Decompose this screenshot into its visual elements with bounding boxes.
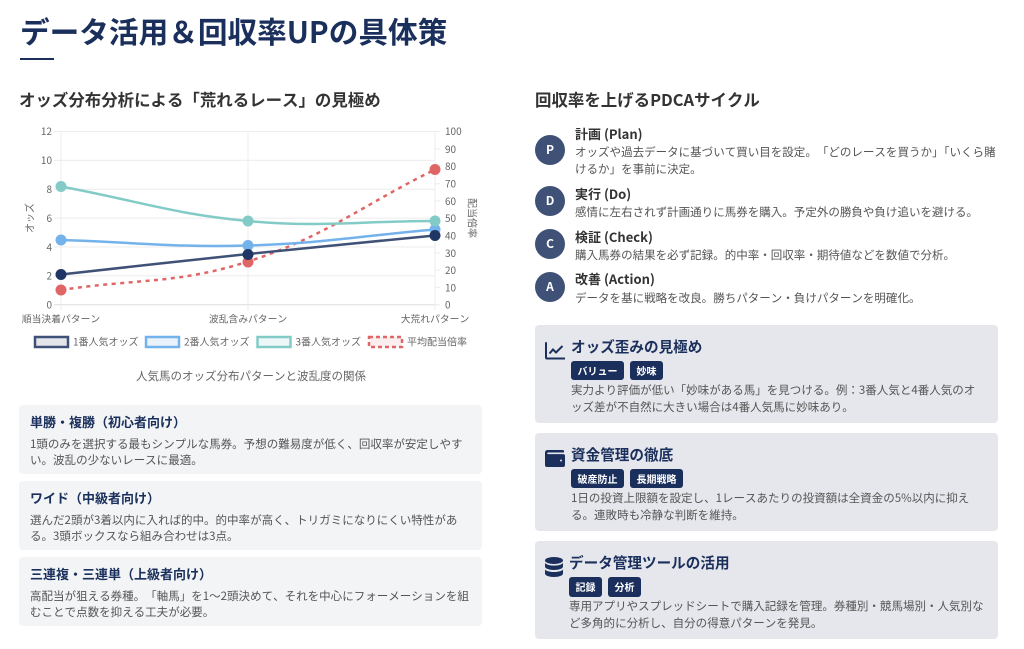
left axis labels <box>41 123 52 312</box>
legend: 3番人気オッズ <box>296 334 361 348</box>
panel: bankroll management <box>535 433 998 531</box>
icon: line chart <box>545 342 565 360</box>
icon: D <box>535 186 565 216</box>
ticket description: る。3頭ボックスなら組み合わせは3点。 <box>30 528 239 544</box>
right axis labels: 30 <box>445 245 457 260</box>
ticket description: い。波乱の少ないレースに最適。 <box>30 452 203 468</box>
PDCA action title: 改善 (Action) <box>575 269 655 288</box>
PDCA plan text <box>575 144 996 177</box>
PDCA do text: 感情に左右されず計画通りに馬券を購入。予定外の勝負や負け追いを避ける。 <box>575 204 978 220</box>
PDCA plan text: けるか」を事前に決定。 <box>575 161 702 177</box>
panel: win and place tickets <box>19 404 482 474</box>
left axis labels: 12 <box>41 123 52 138</box>
tag: 妙味 <box>636 362 656 378</box>
left axis labels: 8 <box>46 181 52 196</box>
legend: 平均配当倍率 <box>407 334 467 348</box>
card heading: 資金管理の徹底 <box>571 444 673 465</box>
ticket description <box>30 436 462 468</box>
card text <box>571 382 975 415</box>
icon: C <box>535 229 565 259</box>
right axis labels: 60 <box>445 193 457 208</box>
icon: A <box>535 272 565 302</box>
card heading: オッズ歪みの見極め <box>571 336 702 357</box>
card text: る。連敗時も冷静な判断を維持。 <box>571 507 744 523</box>
panel: wide tickets <box>19 480 482 550</box>
right axis labels: 100 <box>445 123 462 138</box>
title: データ活用＆回収率UPの具体策 <box>20 9 447 52</box>
card text: ッズ差が不自然に大きい場合は4番人気馬に妙味あり。 <box>571 399 854 415</box>
category labels: 波乱含みパターン <box>209 312 287 326</box>
ticket heading: 単勝・複勝（初心者向け） <box>30 412 186 430</box>
ticket description: むことで点数を抑える工夫が必要。 <box>30 604 214 620</box>
category labels: 大荒れパターン <box>401 312 469 326</box>
tag: 破産防止 <box>578 470 618 486</box>
panel: odds distortion <box>535 325 998 423</box>
legend <box>35 334 467 348</box>
left axis labels: 0 <box>46 296 52 312</box>
tag <box>569 577 602 596</box>
icon: P: P <box>546 141 554 158</box>
icon: D: D <box>546 192 554 209</box>
PDCA do title: 実行 (Do) <box>575 184 631 203</box>
tag <box>608 577 641 596</box>
chart caption: 人気馬のオッズ分布パターンと波乱度の関係 <box>136 368 366 384</box>
tag: 分析 <box>614 579 634 594</box>
right axis labels: 50 <box>445 210 457 225</box>
right axis title: 配当倍率 <box>466 198 480 238</box>
legend: 2番人気オッズ <box>184 334 250 348</box>
right axis labels: 40 <box>445 228 457 242</box>
card text: 1日の投資上限額を設定し、1レースあたりの投資額は全資金の5%以内に抑え <box>571 490 969 506</box>
left axis labels: 10 <box>41 152 52 167</box>
ticket description: 高配当が狙える券種。「軸馬」を1〜2頭決めて、それを中心にフォーメーションを組 <box>30 588 469 604</box>
right axis labels: 90 <box>445 141 457 156</box>
icon: database <box>545 557 563 577</box>
left axis title: オッズ <box>22 203 36 233</box>
left axis labels: 2 <box>46 268 52 282</box>
heading: PDCA: 回収率を上げるPDCAサイクル <box>535 87 760 111</box>
title underline <box>20 58 54 60</box>
ticket heading: ワイド（中級者向け） <box>30 488 160 506</box>
PDCA action text: データを基に戦略を改良。勝ちパターン・負けパターンを明確化。 <box>575 290 920 306</box>
right axis labels: 0 <box>445 296 451 312</box>
series: average payout <box>56 164 440 296</box>
card text: 専用アプリやスプレッドシートで購入記録を管理。券種別・競馬場別・人気別な <box>569 598 984 614</box>
tag: 長期戦略 <box>636 470 676 486</box>
ticket description: 1頭のみを選択する最もシンプルな馬券。予想の難易度が低く、回収率が安定しやす <box>30 436 462 452</box>
PDCA check title: 検証 (Check) <box>575 227 653 246</box>
card text: ど多角的に分析し、自分の得意パターンを発見。 <box>569 615 822 631</box>
icon: P <box>535 135 565 165</box>
tag <box>571 360 624 380</box>
left axis labels: 4 <box>46 239 52 254</box>
ticket description <box>30 588 469 620</box>
tag: バリュー <box>578 362 618 378</box>
right axis labels: 10 <box>445 280 457 294</box>
right axis labels: 70 <box>445 176 457 190</box>
card heading: データ管理ツールの活用 <box>569 552 730 573</box>
icon: A: A <box>546 278 554 295</box>
panel: trio and trifecta tickets <box>19 556 482 626</box>
left axis labels: 6 <box>46 210 52 225</box>
right axis labels <box>445 123 462 312</box>
tag <box>571 468 624 488</box>
legend: 1番人気オッズ <box>73 334 139 348</box>
ticket description <box>30 512 457 544</box>
category labels: 順当決着パターン <box>22 312 100 326</box>
series: first favourite <box>56 230 440 280</box>
category labels <box>22 312 469 326</box>
tag <box>630 360 663 380</box>
right axis labels: 80 <box>445 158 457 173</box>
PDCA plan title: 計画 (Plan) <box>575 124 643 143</box>
series: third favourite <box>56 181 435 226</box>
line chart <box>22 123 480 384</box>
tag: 記録 <box>576 579 596 594</box>
icon: wallet <box>545 450 565 467</box>
PDCA check text: 購入馬券の結果を必ず記録。的中率・回収率・期待値などを数値で分析。 <box>575 247 955 263</box>
tag <box>630 468 683 488</box>
card text <box>569 598 984 631</box>
ticket heading: 三連複・三連単（上級者向け） <box>30 564 212 582</box>
series: second favourite <box>56 224 440 251</box>
PDCA plan text: オッズや過去データに基づいて買い目を設定。「どのレースを買うか」「いくら賭 <box>575 144 996 160</box>
card text <box>571 490 969 523</box>
card text: 実力より評価が低い「妙味がある馬」を見つける。例：3番人気と4番人気のオ <box>571 382 975 398</box>
ticket description: 選んだ2頭が3着以内に入れば的中。的中率が高く、トリガミになりにくい特性があ <box>30 512 457 528</box>
right axis labels: 20 <box>445 262 457 277</box>
heading: odds distribution: オッズ分布分析による「荒れるレース」の見極め <box>19 87 381 111</box>
icon: C: C <box>546 235 554 252</box>
panel: data tools <box>535 541 998 639</box>
